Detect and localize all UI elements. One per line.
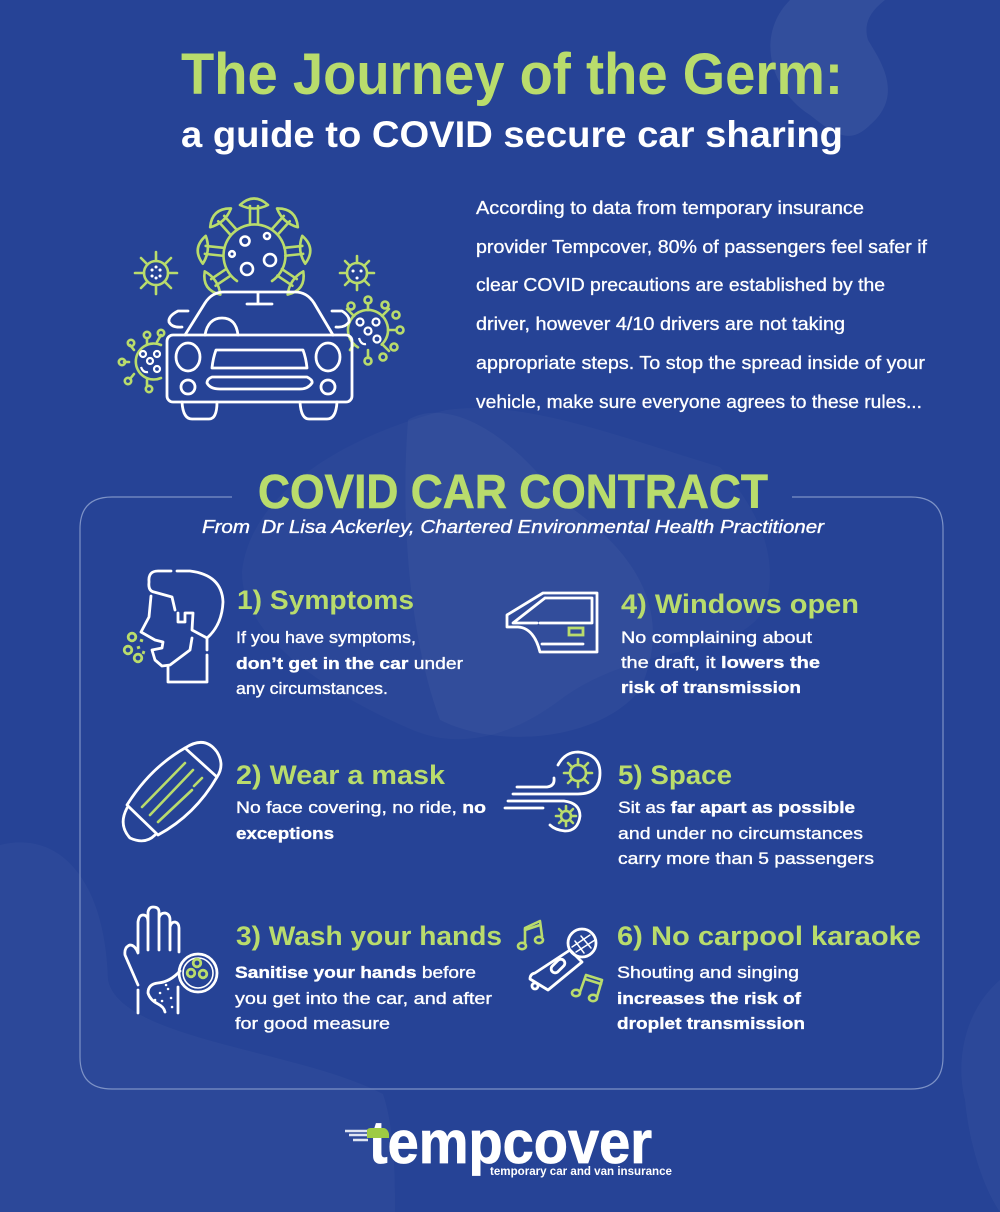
text: wear a mask: No face covering, no ride, no: [236, 798, 486, 817]
text: no carpool karaoke: droplet transmission: [617, 1014, 805, 1033]
logo: tempcover: [345, 1109, 672, 1178]
icon: car: [167, 292, 352, 419]
panel: rule 4 windows open: [507, 589, 859, 697]
icon: hand with magnifier: [125, 907, 217, 1013]
heading: symptoms: 1) Symptoms: [237, 585, 414, 615]
title: The Journey of the Germ:: [181, 42, 843, 107]
icon: virus right: [341, 296, 404, 364]
intro paragraph: vehicle, make sure everyone agrees to these rules...: [476, 392, 922, 412]
text: no carpool karaoke: increases the risk of: [617, 989, 801, 1008]
contract attribution: From Dr Lisa Ackerley, Chartered Environmental Health Practitioner: [202, 517, 825, 537]
intro paragraph: According to data from temporary insurance: [476, 198, 864, 218]
intro paragraph: provider Tempcover, 80% of passengers feel safer if: [476, 237, 928, 257]
text: symptoms: any circumstances.: [236, 679, 388, 698]
heading: space: 5) Space: [618, 760, 732, 790]
icon: small virus top left: [135, 252, 177, 294]
panel: rule 3 wash hands: [125, 907, 502, 1033]
icon: large virus spots: [229, 233, 276, 275]
intro paragraph: driver, however 4/10 drivers are not taking: [476, 314, 845, 334]
text: windows open: the draft, it lowers the: [621, 653, 820, 672]
text: symptoms: [236, 628, 463, 698]
icon: large virus: [196, 198, 312, 298]
text: wash your hands: you get into the car, and after: [235, 989, 492, 1008]
text: space: Sit as far apart as possible: [618, 798, 855, 817]
intro paragraph: appropriate steps. To stop the spread inside of your: [476, 353, 925, 373]
intro paragraph: [476, 198, 928, 412]
heading: wear a mask: 2) Wear a mask: [236, 760, 446, 790]
panel: rule 1 symptoms: [124, 571, 463, 698]
logo car: [367, 1128, 389, 1138]
icon: small virus top right: [340, 256, 374, 290]
heading: no carpool karaoke: 6) No carpool karaoke: [617, 921, 921, 951]
heading: windows open: 4) Windows open: [621, 589, 859, 619]
text: no carpool karaoke: [617, 963, 805, 1033]
text: wash your hands: [235, 963, 492, 1033]
panel: rule 2 mask: [123, 742, 486, 843]
icon: face mask: [123, 742, 221, 841]
panel: rule 6 no carpool karaoke: [518, 921, 921, 1033]
heading: wash your hands: 3) Wash your hands: [236, 921, 502, 951]
text: space: carry more than 5 passengers: [618, 849, 874, 868]
text: wear a mask: [236, 798, 486, 843]
logo wordmark: tempcover: [369, 1109, 652, 1176]
text: space: [618, 798, 874, 868]
icon: car door: [507, 593, 597, 652]
logo tagline: temporary car and van insurance: [490, 1166, 672, 1178]
subtitle: a guide to COVID secure car sharing: [181, 114, 843, 155]
text: symptoms: don’t get in the car under: [236, 654, 463, 673]
icon: virus left: [119, 330, 164, 392]
text: space: and under no circumstances: [618, 824, 863, 843]
text: wear a mask: exceptions: [236, 824, 334, 843]
text: wash your hands: for good measure: [235, 1014, 390, 1033]
panel: rule 5 space: [505, 752, 874, 868]
icon: wind and viruses: [505, 752, 600, 831]
text: wash your hands: Sanitise your hands before: [235, 963, 476, 982]
text: no carpool karaoke: Shouting and singing: [617, 963, 799, 982]
icon: coughing head: [124, 571, 223, 682]
text: windows open: risk of transmission: [621, 678, 801, 697]
icon: microphone and music notes: [518, 921, 602, 1001]
text: windows open: [621, 628, 820, 697]
icon: car surrounded by viruses: [119, 198, 404, 419]
contract heading: COVID CAR CONTRACT: [258, 466, 768, 519]
text: symptoms: If you have symptoms,: [236, 628, 416, 647]
panel: contract outline: [80, 497, 943, 1089]
logo speed lines: [345, 1131, 368, 1140]
intro paragraph: clear COVID precautions are established by the: [476, 275, 885, 295]
text: windows open: No complaining about: [621, 628, 812, 647]
